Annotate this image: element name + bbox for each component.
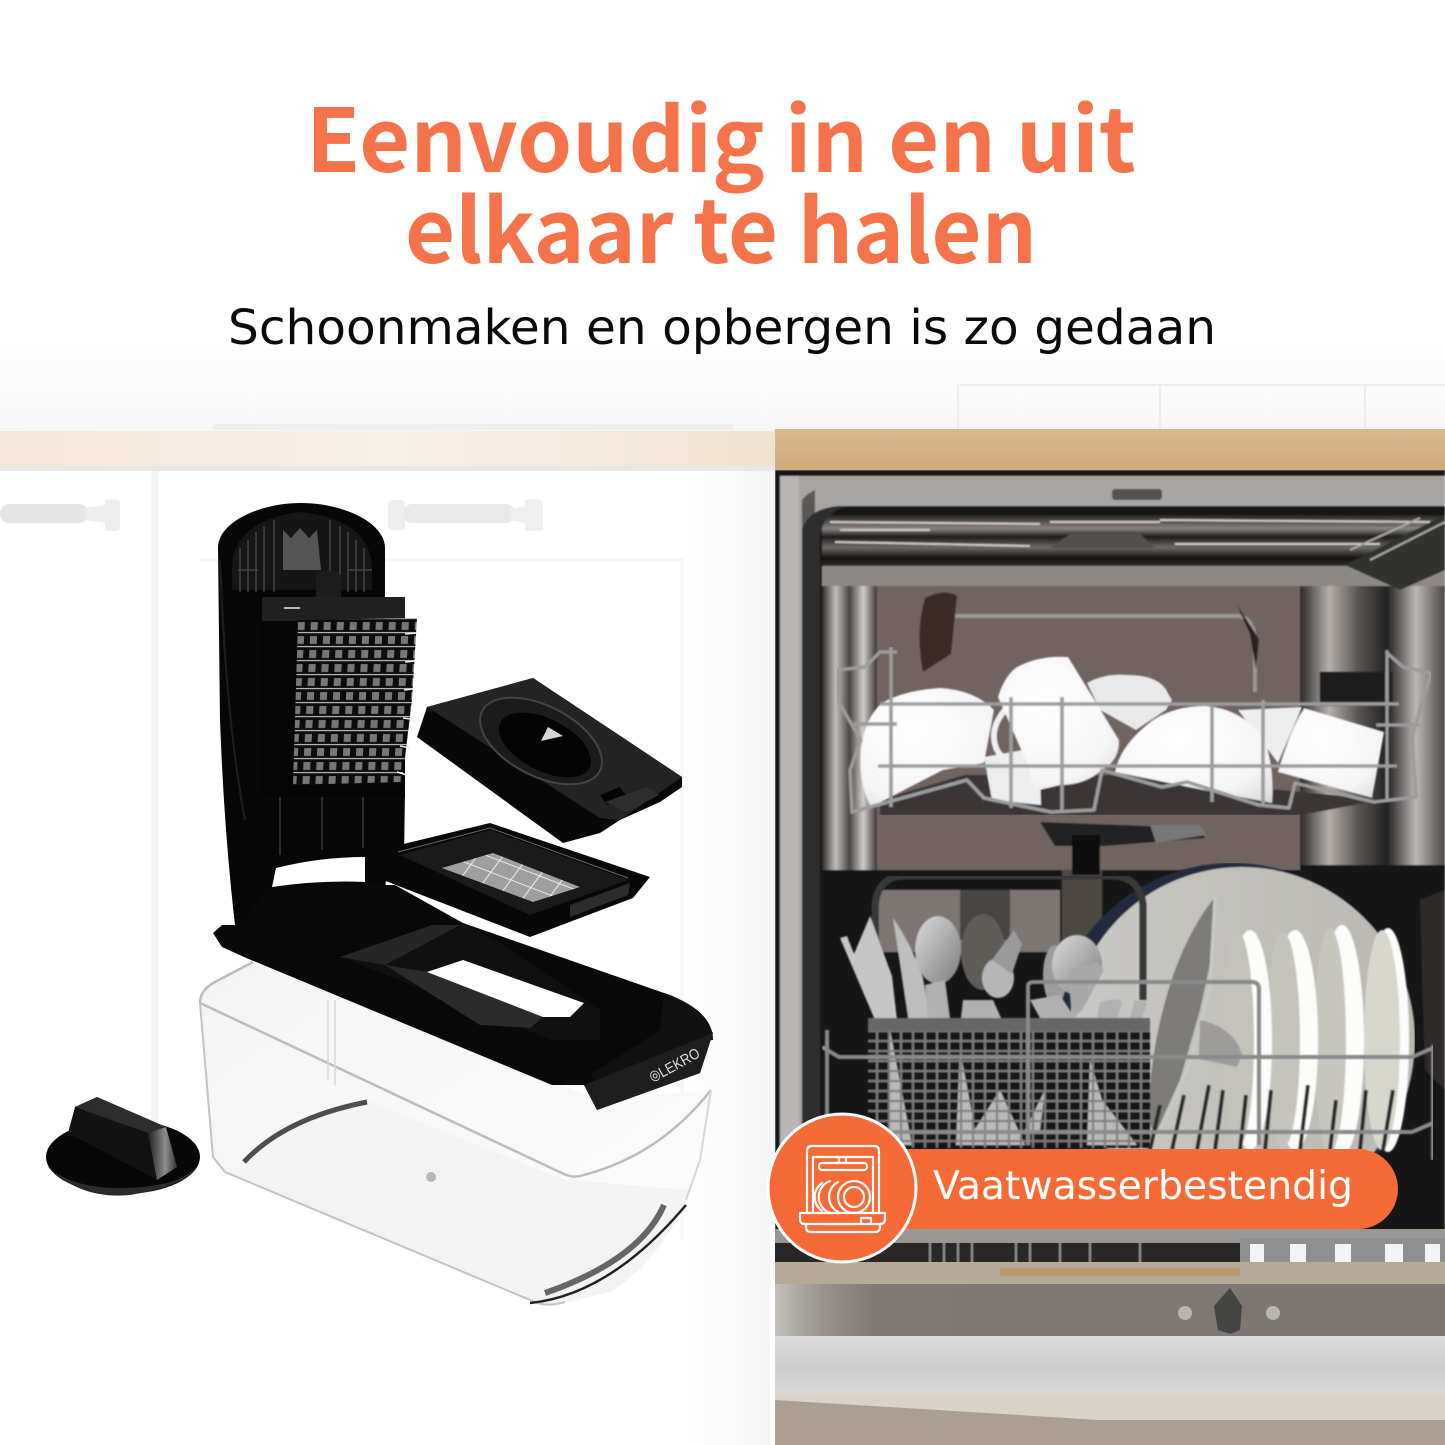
cabinet handle centre bbox=[388, 499, 543, 531]
knob bbox=[46, 1097, 200, 1196]
badge circle bbox=[768, 1114, 916, 1262]
black base and hinged lid bbox=[213, 503, 713, 1110]
upper rack with cups bbox=[837, 647, 1431, 815]
cups bbox=[860, 657, 1384, 807]
door frame bbox=[780, 476, 1445, 1240]
left cabinets bbox=[0, 466, 775, 1445]
cutlery bbox=[840, 914, 1147, 1020]
countertop bbox=[0, 429, 1445, 470]
clear container bbox=[200, 962, 711, 1305]
rack shadow floor bbox=[880, 775, 1380, 815]
plate rims bbox=[1222, 925, 1409, 1155]
dishwasher door bbox=[770, 1225, 1445, 1445]
product: vegetable chopper bbox=[46, 503, 713, 1305]
rack wires bbox=[837, 647, 1431, 812]
brand label: ⦾LEKRO bbox=[647, 1045, 703, 1086]
pan lid bbox=[1148, 897, 1215, 1135]
title line 2: elkaar te halen bbox=[405, 162, 1037, 289]
lower rack: plates bbox=[1050, 863, 1415, 1227]
dishwasher interior bbox=[775, 470, 1445, 1270]
cabinet handle left bbox=[0, 499, 120, 531]
title line 1: Eenvoudig in en uit bbox=[306, 71, 1136, 198]
heading bbox=[306, 71, 1136, 289]
cutlery basket bbox=[822, 876, 1433, 1160]
dicing blade tray bbox=[383, 823, 650, 937]
lower interior bbox=[820, 870, 1445, 1250]
badge label: Vaatwasserbestendig bbox=[933, 1164, 1353, 1209]
subtitle: Schoonmaken en opbergen is zo gedaan bbox=[228, 300, 1216, 356]
dicing blade teeth bbox=[284, 608, 417, 785]
dishwasher bbox=[770, 470, 1445, 1445]
top slicing plate with oval hole bbox=[417, 678, 682, 843]
icon: dishwasher bbox=[800, 1146, 885, 1232]
badge pill bbox=[842, 1149, 1398, 1229]
badge: dishwasher safe bbox=[768, 1114, 1398, 1262]
